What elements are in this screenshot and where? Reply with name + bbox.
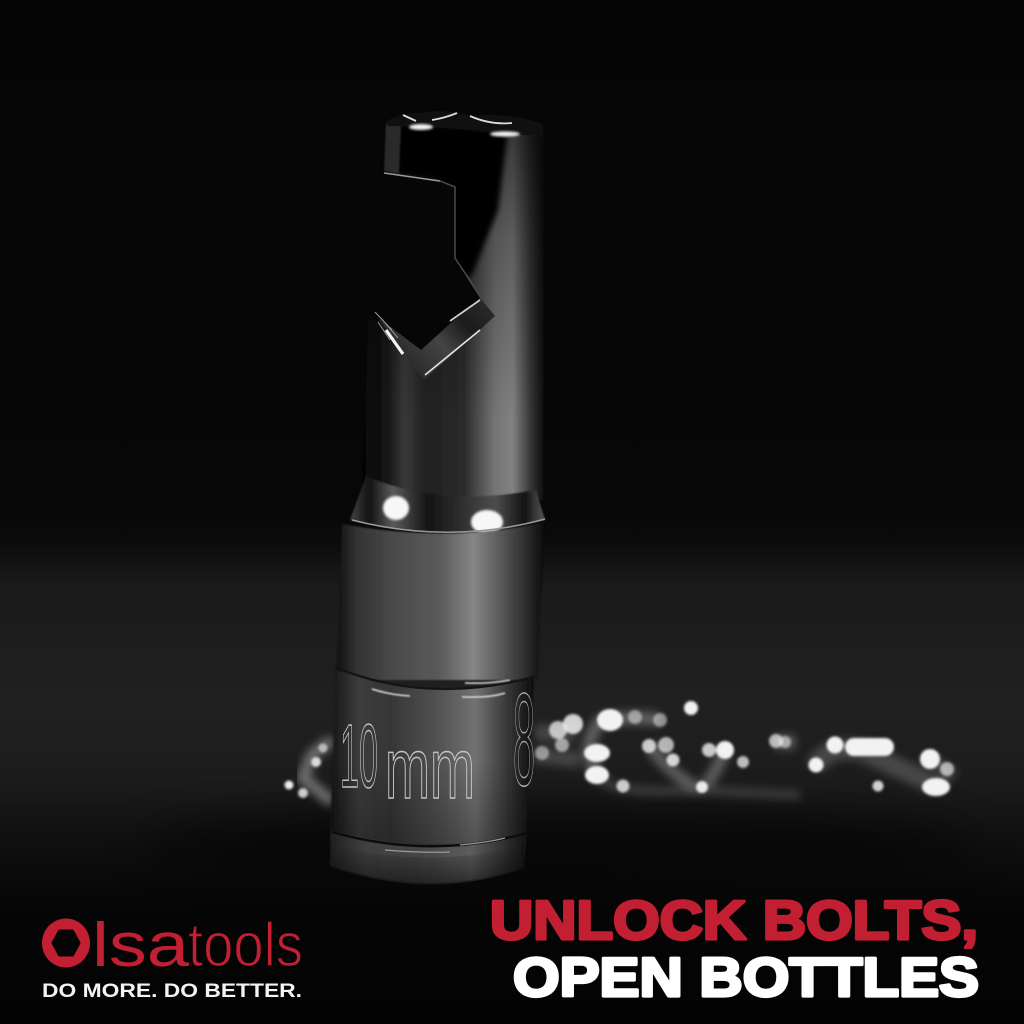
socket bottle opener [330,111,545,884]
headline [490,889,979,1008]
logo tagline: DO MORE. DO BETTER. [42,980,302,1002]
socket collar [350,476,545,534]
bottle opener mouth cut-out [366,172,480,351]
base shading [330,845,526,884]
mouth inner step line [440,181,481,297]
embossed size unit: mm [385,721,475,817]
logo O with hexagon [42,918,90,968]
socket bottle opener: 10 [340,707,378,807]
upper mouth dark reflection [383,124,508,280]
mouth inner ledge highlight [384,173,440,181]
clasp haze [535,718,950,795]
lower ring shading [330,760,531,845]
infographic canvas: 8 [513,666,535,813]
logo name light: tools [188,911,303,980]
headline line two: OPEN BOTTLES [513,946,979,1008]
base groove highlights [385,838,505,852]
logo name bold: lsa [92,911,190,980]
headline line one: UNLOCK BOLTS, [490,889,978,951]
brand logo block [42,911,303,1002]
clasp bright bokeh spots [535,701,954,796]
contact shadow beneath the socket [140,809,980,881]
socket base [330,830,527,884]
socket drive body [336,522,544,680]
blurred keychain clasp [535,701,954,796]
socket neck [362,122,543,500]
socket top rim [386,111,543,137]
upper lip of the opener [384,123,401,174]
ring groove [337,668,533,689]
opener tooth bevel [375,299,495,380]
groove highlights [372,680,510,697]
socket lower ring [330,670,534,845]
base groove [332,832,527,846]
logo wordmark [42,911,303,980]
blurred left chain link [284,740,332,802]
